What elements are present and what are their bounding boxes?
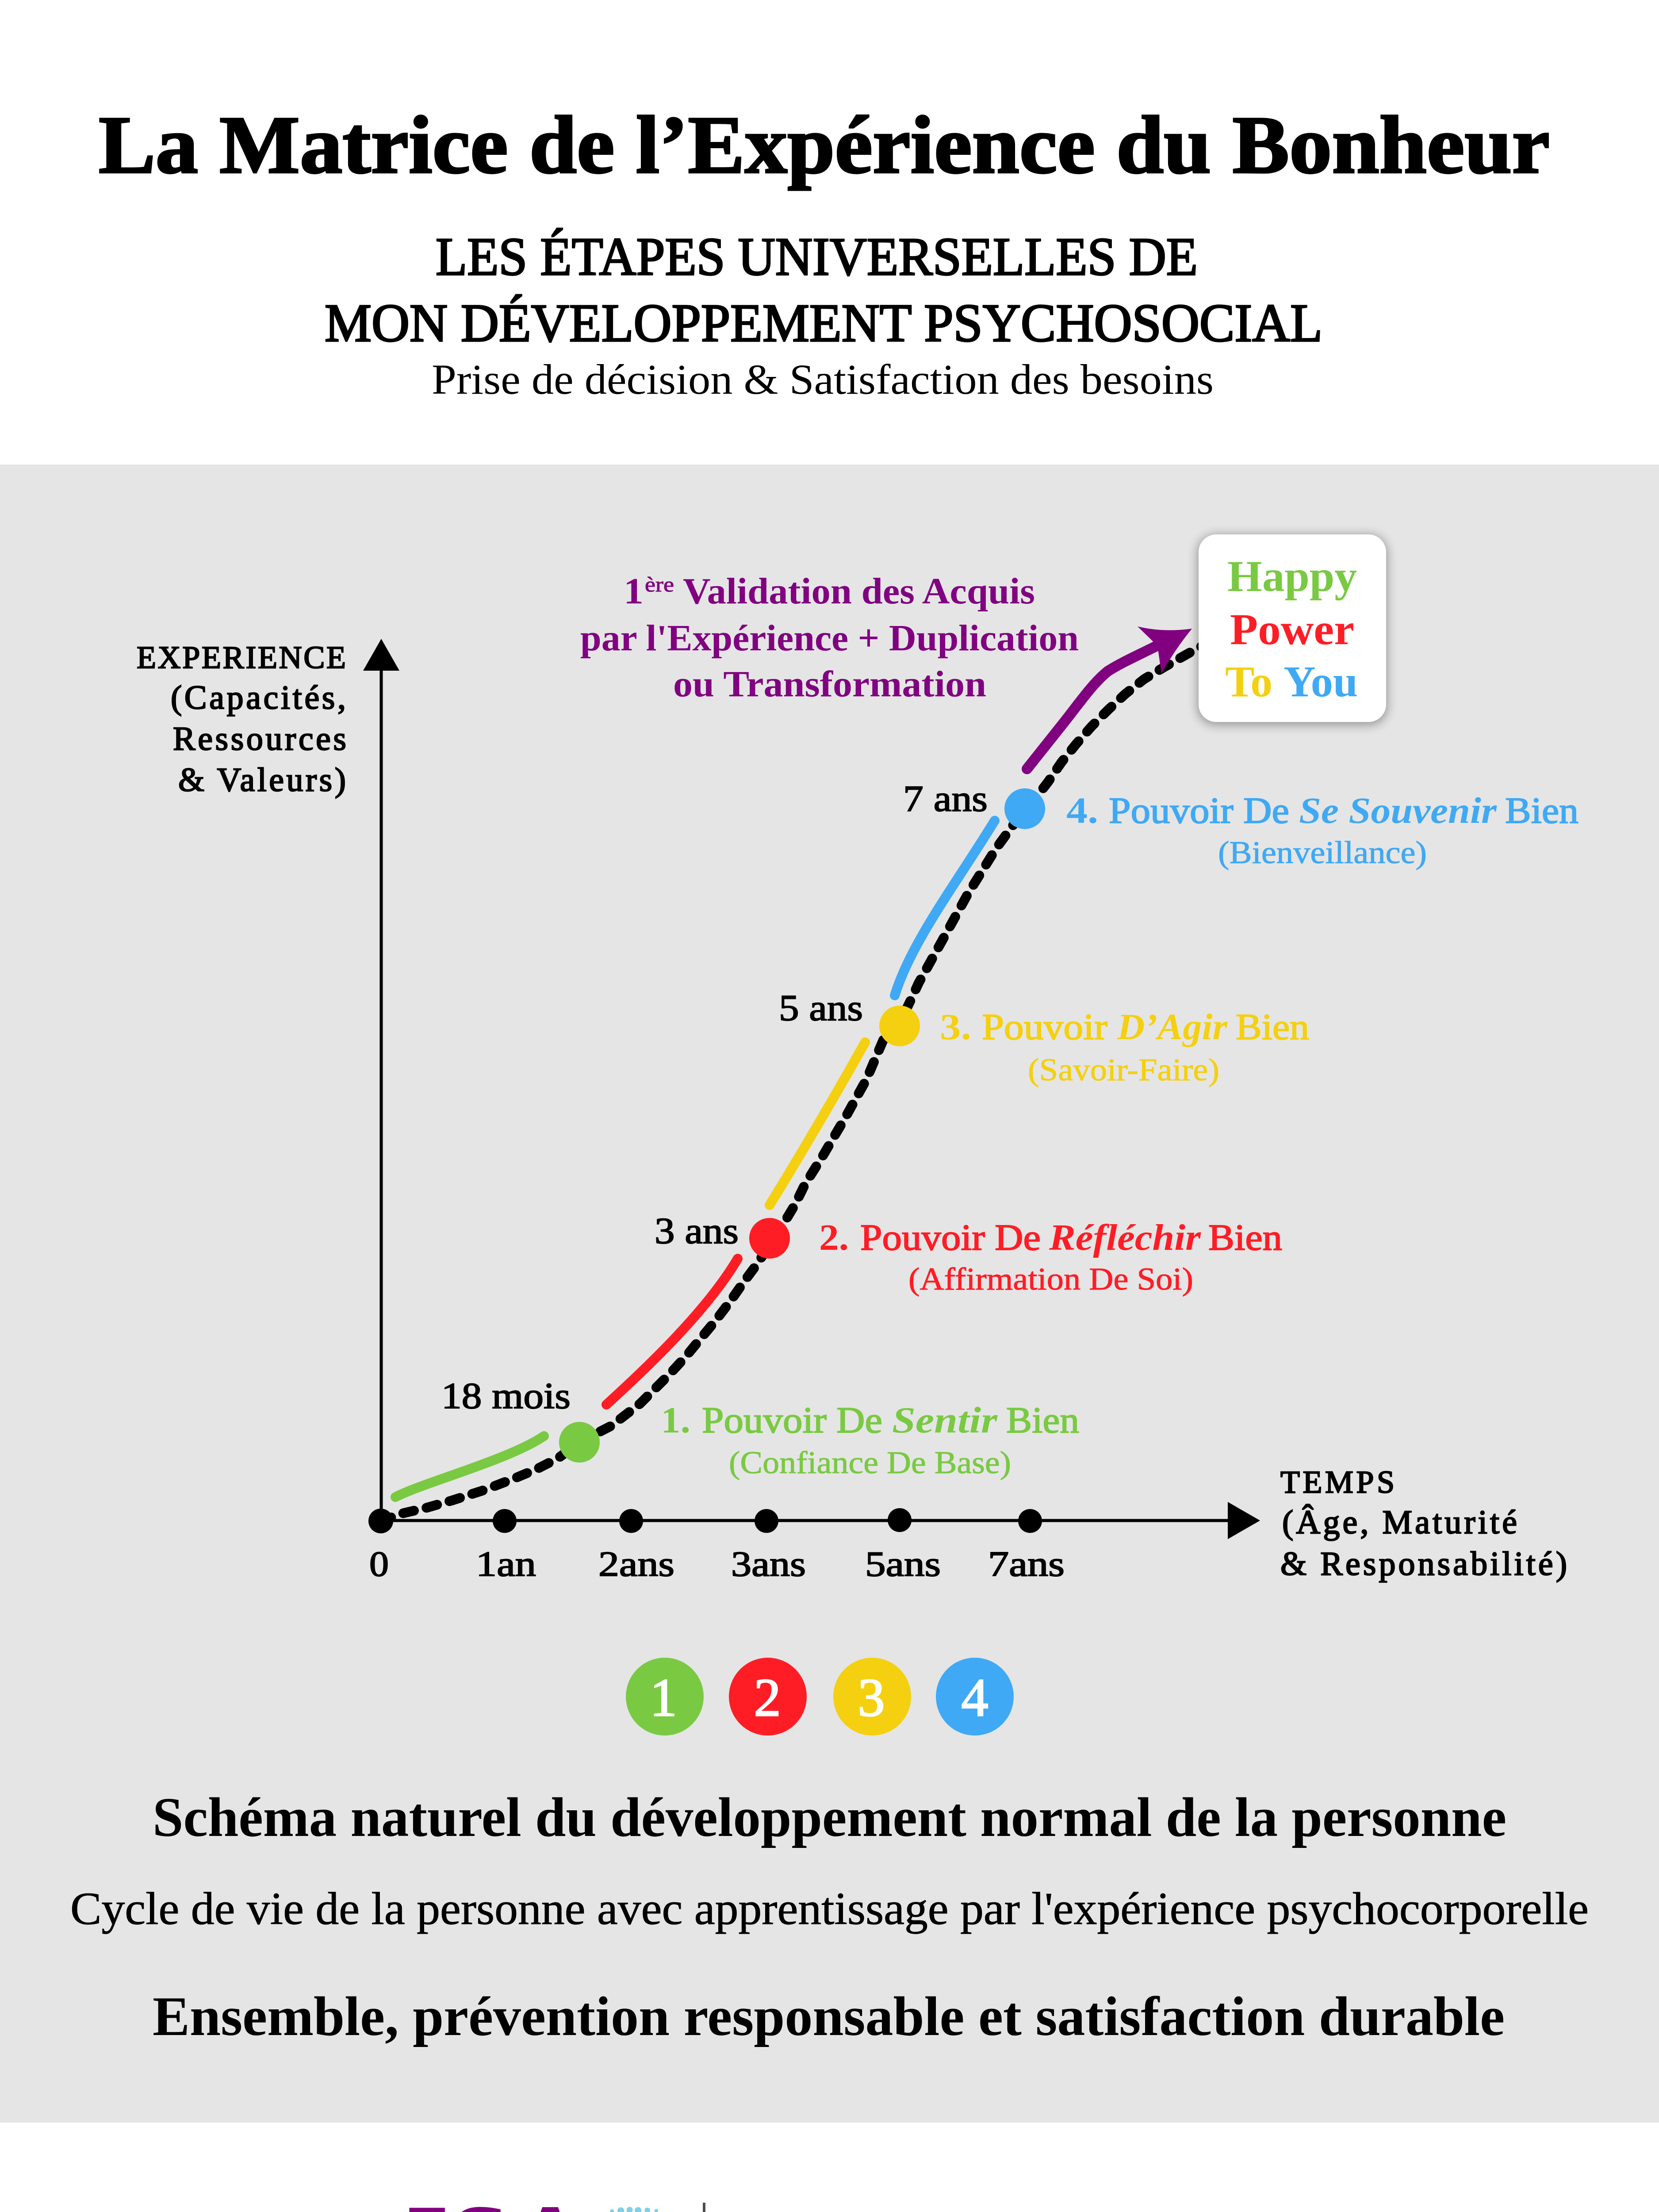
subtitle block: LES ÉTAPES UNIVERSELLES DE: [436, 227, 1198, 287]
numbered legend circles: 4: [962, 1668, 988, 1728]
validation text: ou Transformation: [673, 664, 986, 705]
chart: development curve: [137, 534, 1579, 1584]
stage 3 label: Bien: [1236, 1006, 1309, 1048]
y axis label: [137, 640, 346, 799]
subtitle block: Prise de décision & Satisfaction des besoins: [432, 356, 1214, 403]
stage 2 label: 2.: [819, 1217, 849, 1258]
title: La Matrice de l’Expérience du Bonheur: [99, 100, 1550, 191]
y axis label: EXPERIENCE: [137, 640, 346, 675]
x axis arrow with ticks: [368, 1502, 1260, 1539]
stage 4 label: Bien: [1505, 790, 1579, 831]
stage 3 label: [940, 1006, 1309, 1087]
validation text: par l'Expérience + Duplication: [580, 618, 1079, 659]
x axis label: [1280, 1464, 1567, 1582]
stage segment: green: [395, 1436, 544, 1497]
stage 1 label: (Confiance De Base): [729, 1445, 1011, 1480]
stage 4 label: Pouvoir De: [1109, 790, 1289, 831]
panel: grey chart background: [0, 465, 1659, 2123]
y axis arrow: [363, 639, 399, 1521]
y axis label: & Valeurs): [178, 761, 346, 799]
stage 3 label: (Savoir-Faire): [1028, 1052, 1219, 1087]
stage 2 label: Bien: [1208, 1217, 1282, 1258]
numbered legend circles: 3: [858, 1668, 885, 1728]
footer divider: [703, 2203, 705, 2212]
heading: ensemble: Ensemble, prévention responsable et satisfaction durable: [153, 1986, 1505, 2047]
x axis tick labels: 7ans: [988, 1545, 1065, 1584]
Happy Power To You box: Happy: [1227, 552, 1357, 601]
numbered legend circles: [626, 1658, 1014, 1736]
y axis label: (Capacités,: [171, 679, 346, 716]
validation text: 1: [624, 571, 644, 612]
x axis label: (Âge, Maturité: [1282, 1504, 1517, 1541]
stage 4 label: 4.: [1066, 790, 1098, 831]
Happy Power To You box: Power: [1230, 605, 1354, 654]
stage segment: blue: [895, 821, 995, 995]
age labels: 18 mois: [441, 1375, 571, 1417]
stage 3 label: D’Agir: [1117, 1006, 1228, 1048]
Happy Power To You box: [1198, 534, 1387, 725]
numbered legend circles: 2: [754, 1668, 781, 1728]
Happy Power To You box: You: [1284, 657, 1358, 706]
x axis tick labels: 0: [369, 1545, 389, 1584]
stage 2 label: Pouvoir De: [860, 1217, 1041, 1258]
stage segment: yellow: [770, 1042, 865, 1205]
stage 3 label: 3.: [940, 1006, 971, 1048]
text: cycle de vie: Cycle de vie de la personne avec apprentissage par l'expérience psychocorporelle: [70, 1883, 1589, 1934]
y axis label: Ressources: [173, 720, 346, 757]
stage 1 label: Sentir: [892, 1400, 998, 1441]
validation text: [580, 571, 1079, 705]
stage 4 label: [1066, 790, 1579, 870]
stage 2 label: [819, 1217, 1282, 1297]
x axis tick labels: 1an: [476, 1545, 536, 1584]
Happy Power To You box: To: [1225, 657, 1272, 706]
stage segment: red: [606, 1259, 738, 1405]
x axis label: TEMPS: [1280, 1464, 1395, 1500]
icon: dotted brain: [594, 2207, 677, 2212]
age labels: 5 ans: [779, 987, 863, 1029]
stage 2 label: (Affirmation De Soi): [908, 1261, 1193, 1297]
age labels: [441, 778, 988, 1417]
stage arrow: purple: [1027, 626, 1192, 769]
stage 1 label: 1.: [661, 1400, 690, 1441]
x axis tick labels: 2ans: [598, 1545, 674, 1584]
x axis label: & Responsabilité): [1280, 1545, 1567, 1582]
heading: schéma naturel: Schéma naturel du développement normal de la personne: [153, 1787, 1506, 1848]
stage 2 label: Réfléchir: [1049, 1217, 1201, 1258]
age labels: 7 ans: [903, 778, 988, 819]
stage 1 label: [661, 1400, 1079, 1480]
subtitle block: MON DÉVELOPPEMENT PSYCHOSOCIAL: [325, 293, 1322, 353]
validation text: ère: [645, 573, 674, 596]
milestone dots: [559, 788, 1045, 1463]
stage 1 label: Bien: [1006, 1400, 1079, 1441]
validation text: Validation des Acquis: [683, 571, 1035, 612]
stage 3 label: Pouvoir: [982, 1006, 1107, 1048]
dashed growth curve: [381, 644, 1207, 1521]
subtitle block: [325, 227, 1322, 403]
age labels: 3 ans: [655, 1210, 739, 1252]
stage 1 label: Pouvoir De: [702, 1400, 882, 1441]
x axis tick labels: 3ans: [731, 1545, 806, 1584]
stage 4 label: (Bienveillance): [1218, 835, 1427, 870]
stage 4 label: Se Souvenir: [1299, 790, 1497, 831]
x axis tick labels: [369, 1545, 1065, 1584]
x axis tick labels: 5ans: [865, 1545, 941, 1584]
numbered legend circles: 1: [650, 1668, 677, 1728]
